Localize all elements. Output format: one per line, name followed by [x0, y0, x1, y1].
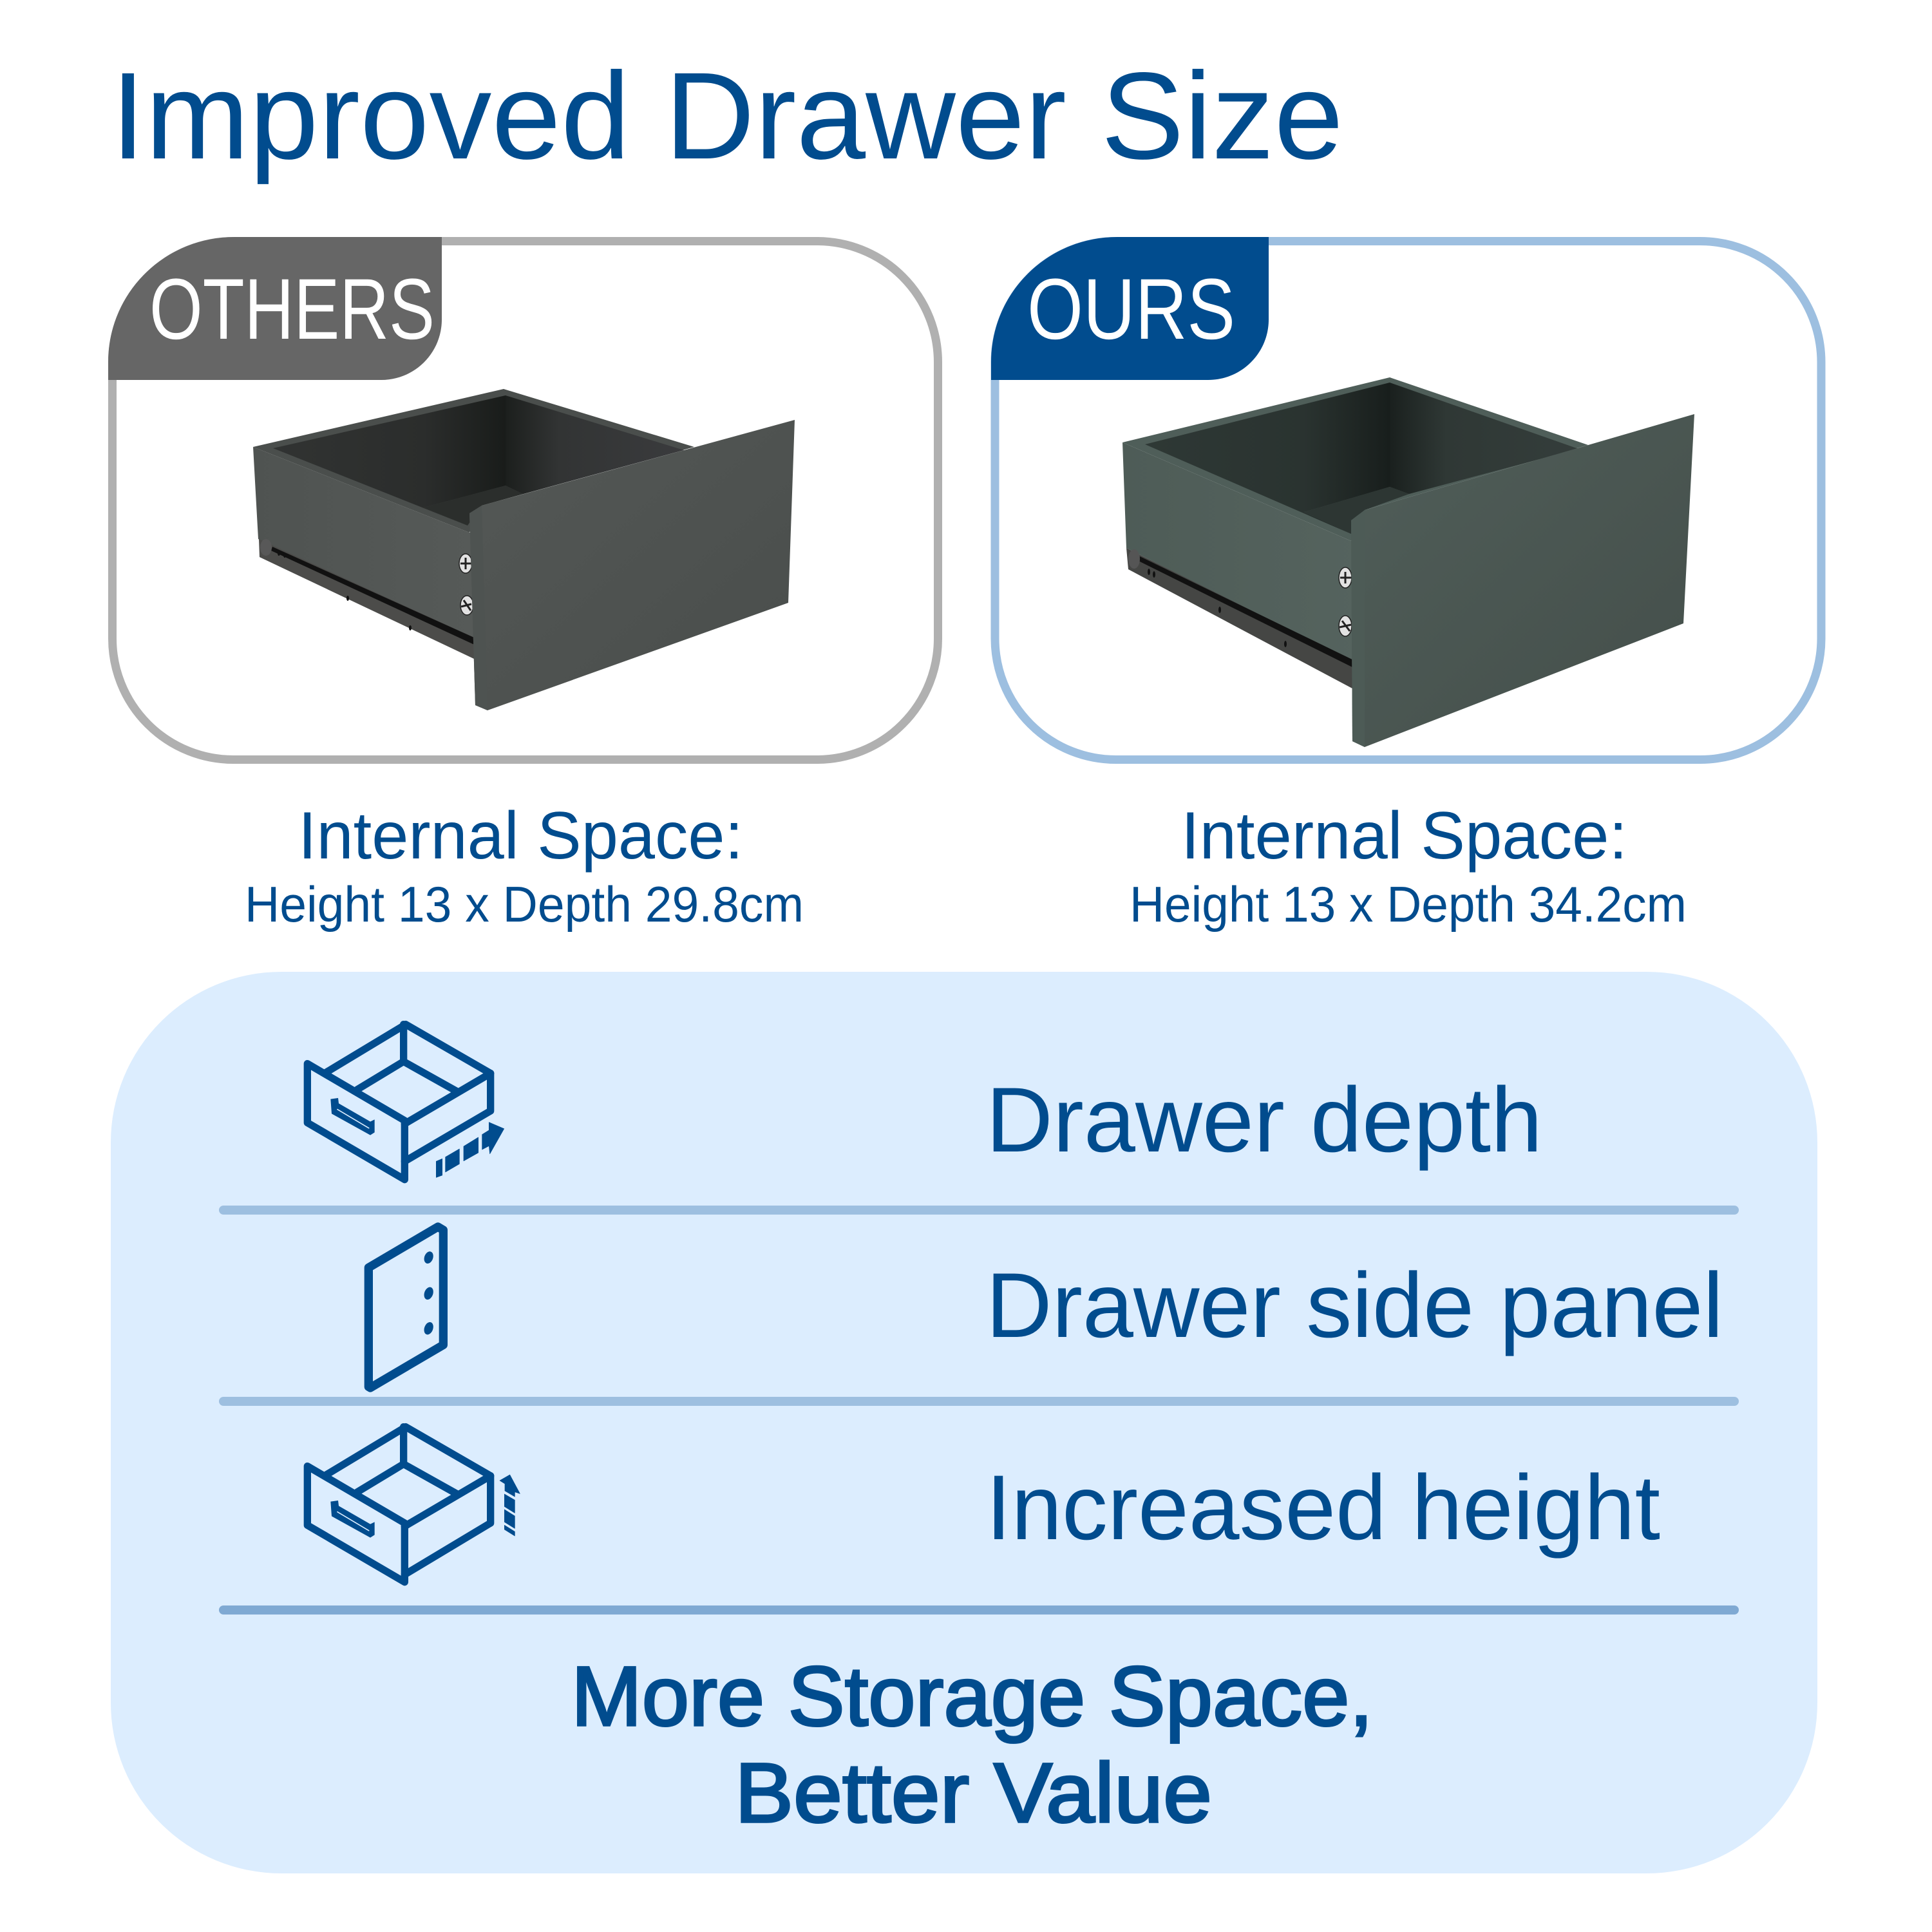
ours caption size: Height 13 x Depth 34.2cm [1130, 876, 1687, 933]
ours label text: OURS [1027, 261, 1235, 357]
divider row 2 [219, 1397, 1739, 1406]
icon: increased height [307, 1427, 520, 1582]
conclusion line 1: More Storage Space, [571, 1649, 1373, 1743]
conclusion text [571, 1649, 1373, 1840]
improvements background [111, 972, 1817, 1873]
panel: others [108, 237, 938, 760]
others panel frame [112, 241, 938, 760]
divider row 1 [219, 1206, 1739, 1215]
divider row 3 [219, 1605, 1739, 1615]
label: increased height: Increased height [986, 1457, 1660, 1559]
conclusion line 2: Better Value [735, 1745, 1212, 1840]
ours caption heading: Internal Space: [1181, 799, 1627, 873]
caption: ours [1130, 799, 1687, 933]
others caption size: Height 13 x Depth 29.8cm [245, 876, 804, 933]
others label text: OTHERS [149, 261, 435, 357]
label: drawer side panel: Drawer side panel [986, 1255, 1723, 1357]
others caption heading: Internal Space: [298, 799, 743, 873]
others label tab [108, 237, 442, 380]
title: Improved Drawer Size [111, 46, 1343, 185]
panel: improvements [111, 972, 1817, 1873]
ours label tab [991, 237, 1269, 380]
icon: drawer side panel [368, 1227, 443, 1388]
ours panel frame [995, 241, 1821, 760]
label: drawer depth: Drawer depth [986, 1069, 1542, 1171]
icon: drawer depth [307, 1025, 504, 1180]
panel: ours [991, 237, 1821, 760]
caption: others [245, 799, 804, 933]
drawer photo: ours [1122, 377, 1694, 747]
drawer photo: others [253, 389, 795, 710]
